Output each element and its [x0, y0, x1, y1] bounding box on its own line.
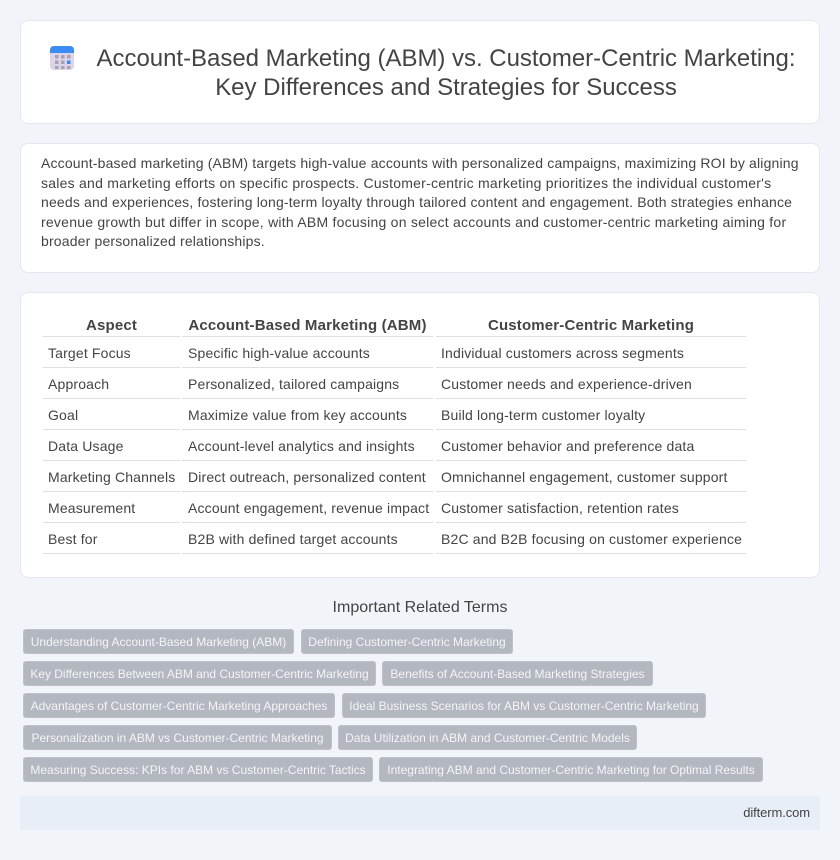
- row: measurement: Customer satisfaction, retention rates: [441, 500, 679, 516]
- row: target focus: Specific high-value accounts: [188, 345, 370, 361]
- footer bar: [20, 796, 820, 830]
- row: best for: [48, 531, 742, 547]
- tag: [23, 693, 335, 718]
- tag: [23, 629, 294, 654]
- table header: Account-Based Marketing (ABM): [188, 317, 427, 334]
- tag: [301, 629, 513, 654]
- row: marketing channels: [48, 469, 728, 485]
- row: goal: Goal: [48, 407, 78, 423]
- table header: [86, 317, 694, 334]
- row: measurement: Measurement: [48, 500, 135, 516]
- row: marketing channels: Marketing Channels: [48, 469, 175, 485]
- table header: Customer-Centric Marketing: [488, 317, 694, 334]
- summary text: needs and experiences, fostering long-term loyalty through tailored content and engagement. Both strategies enhance: [41, 194, 792, 210]
- panel: comparison table: [20, 292, 820, 578]
- row: goal: Maximize value from key accounts: [188, 407, 407, 423]
- tag: Integrating ABM and Customer-Centric Marketing for Optimal Results: [387, 763, 755, 777]
- footer source: difterm.com: [743, 805, 810, 820]
- row: approach: Approach: [48, 376, 109, 392]
- row: best for: B2B with defined target accounts: [188, 531, 398, 547]
- summary text: revenue growth but differ in scope, with ABM focusing on select accounts and customer-centric marketing aiming for: [41, 214, 786, 230]
- tag: Personalization in ABM vs Customer-Centric Marketing: [31, 731, 324, 745]
- row: best for: Best for: [48, 531, 98, 547]
- summary text: sales and marketing efforts on specific prospects. Customer-centric marketing prioritizes the individual customer's: [41, 175, 771, 191]
- tag: [342, 693, 706, 718]
- title: Account-Based Marketing (ABM) vs. Customer-Centric Marketing: Key Differences and Strategies for Success: [96, 45, 796, 101]
- row: best for: B2C and B2B focusing on customer experience: [441, 531, 742, 547]
- row: goal: [48, 407, 646, 423]
- icon: calendar: [50, 46, 74, 70]
- tag: [379, 757, 763, 782]
- row: target focus: Target Focus: [48, 345, 131, 361]
- row: target focus: [48, 345, 684, 361]
- row: approach: Customer needs and experience-driven: [441, 376, 692, 392]
- tag: [382, 661, 653, 686]
- panel: summary card: [20, 143, 820, 273]
- row: approach: [48, 376, 692, 392]
- tag: [338, 725, 637, 750]
- tag: Data Utilization in ABM and Customer-Centric Models: [345, 731, 630, 745]
- tag: [23, 661, 376, 686]
- row: data usage: [48, 438, 694, 454]
- row: marketing channels: Direct outreach, personalized content: [188, 469, 426, 485]
- related terms heading: Important Related Terms: [333, 599, 507, 616]
- table header: Aspect: [86, 317, 137, 334]
- summary text: broader personalized relationships.: [41, 233, 265, 249]
- tag: Key Differences Between ABM and Customer-Centric Marketing: [30, 667, 369, 681]
- row: data usage: Account-level analytics and insights: [188, 438, 415, 454]
- tag: [23, 757, 373, 782]
- row: measurement: [48, 500, 679, 516]
- row: target focus: Individual customers across segments: [441, 345, 684, 361]
- tag list: related terms: [23, 629, 763, 782]
- panel: title card: [20, 20, 820, 124]
- tag: Understanding Account-Based Marketing (ABM): [31, 635, 286, 649]
- tag: Ideal Business Scenarios for ABM vs Customer-Centric Marketing: [349, 699, 699, 713]
- tag: Defining Customer-Centric Marketing: [308, 635, 506, 649]
- row: approach: Personalized, tailored campaigns: [188, 376, 399, 392]
- summary text: Account-based marketing (ABM) targets high-value accounts with personalized campaigns, maximizing ROI by aligning: [41, 155, 799, 171]
- tag: Advantages of Customer-Centric Marketing Approaches: [31, 699, 327, 713]
- row: marketing channels: Omnichannel engagement, customer support: [441, 469, 728, 485]
- tag: Benefits of Account-Based Marketing Strategies: [390, 667, 645, 681]
- row: measurement: Account engagement, revenue impact: [188, 500, 429, 516]
- tag: Measuring Success: KPIs for ABM vs Customer-Centric Tactics: [30, 763, 366, 777]
- row: data usage: Data Usage: [48, 438, 124, 454]
- summary text: [41, 155, 799, 249]
- tag: [23, 725, 332, 750]
- row: goal: Build long-term customer loyalty: [441, 407, 645, 423]
- row: data usage: Customer behavior and preference data: [441, 438, 694, 454]
